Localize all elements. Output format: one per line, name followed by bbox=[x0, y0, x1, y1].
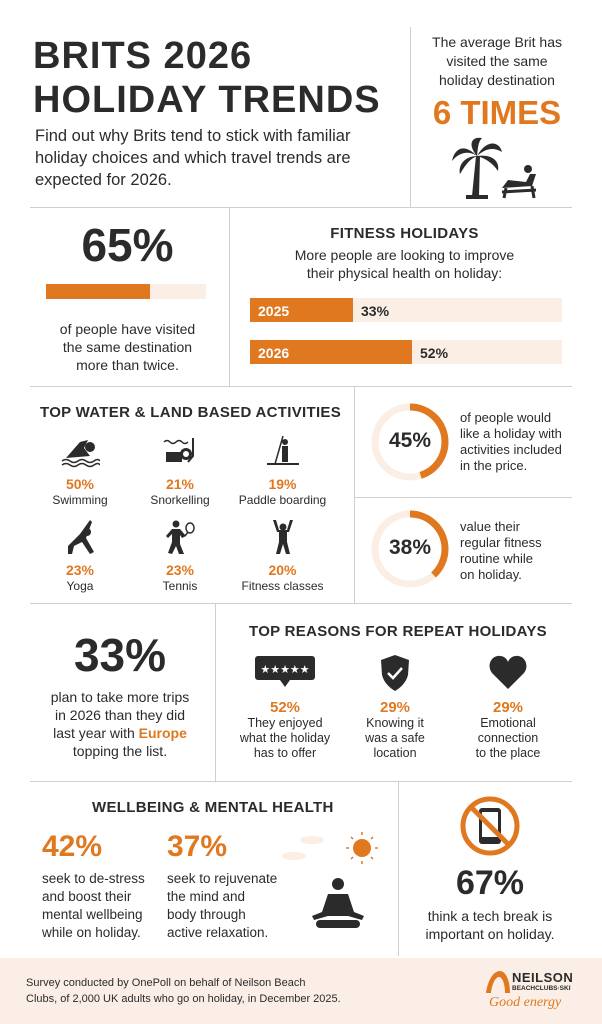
stat 37%: the mind and bbox=[167, 889, 245, 904]
donut 38%: value their bbox=[460, 519, 520, 534]
donut 45%: 45% bbox=[389, 429, 431, 452]
reason 1: ★★★★★ bbox=[260, 663, 310, 676]
panel: tech break: important on holiday. bbox=[426, 926, 554, 942]
stat 37%: 37% bbox=[167, 830, 227, 863]
bar 2025 bbox=[250, 298, 562, 322]
panel: activities bbox=[40, 404, 341, 593]
activity: snorkelling: Snorkelling bbox=[150, 493, 210, 507]
title bbox=[33, 35, 381, 121]
activity: snorkelling bbox=[150, 438, 210, 507]
panel: tech break bbox=[426, 796, 554, 942]
panel: fitness holidays: their physical health on holiday: bbox=[307, 265, 502, 281]
stat 42%: mental wellbeing bbox=[42, 907, 143, 922]
reason 3: connection bbox=[478, 731, 538, 745]
panel: 6 times: visited the same bbox=[446, 53, 548, 69]
logo: Good energy bbox=[489, 995, 561, 1010]
panel: fitness holidays: FITNESS HOLIDAYS bbox=[330, 225, 479, 242]
activity: paddle boarding bbox=[239, 436, 326, 507]
stat 42%: seek to de-stress bbox=[42, 871, 145, 886]
bar 2026 bbox=[250, 340, 562, 364]
panel: wellbeing: WELLBEING & MENTAL HEALTH bbox=[92, 799, 334, 816]
donut 45%: activities included bbox=[460, 442, 562, 457]
title: BRITS 2026 bbox=[33, 35, 252, 77]
stat 42%: and boost their bbox=[42, 889, 131, 904]
panel: top reasons: TOP REASONS FOR REPEAT HOLIDAYS bbox=[249, 623, 547, 640]
bar 65 bbox=[46, 284, 206, 299]
activity: yoga: 23% bbox=[66, 562, 94, 578]
panel: 33%: plan to take more trips bbox=[51, 689, 189, 705]
activity: swimming bbox=[52, 440, 108, 507]
panel: 33%: 33% bbox=[74, 629, 166, 681]
stat 42%: while on holiday. bbox=[42, 925, 141, 940]
reason 1: 52% bbox=[270, 699, 300, 716]
panel: 65%: of people have visited bbox=[60, 321, 195, 337]
activity: fitness classes: 20% bbox=[268, 562, 297, 578]
reason 1: They enjoyed bbox=[247, 716, 323, 730]
icon: no phone bbox=[460, 796, 520, 856]
reason 1 bbox=[240, 656, 330, 760]
donut 38% bbox=[372, 510, 542, 588]
activity: swimming: 50% bbox=[66, 476, 94, 492]
subtitle: Find out why Brits tend to stick with familiar holiday choices and which travel trends are expected for 2026. bbox=[35, 127, 351, 189]
bar 2025: 33% bbox=[361, 303, 389, 319]
donut 45% bbox=[372, 404, 562, 480]
stat 37% bbox=[167, 830, 277, 940]
donut 38%: routine while bbox=[460, 551, 533, 566]
panel: tech break: think a tech break is bbox=[428, 908, 552, 924]
reason 3: Emotional bbox=[480, 716, 536, 730]
donut 38%: 38% bbox=[389, 536, 431, 559]
stat 37%: body through bbox=[167, 907, 246, 922]
reason 2: 29% bbox=[380, 699, 410, 716]
panel: 6 times: The average Brit has bbox=[432, 34, 562, 50]
activity: tennis: 23% bbox=[166, 562, 194, 578]
activity: tennis: Tennis bbox=[163, 579, 197, 593]
panel: top reasons bbox=[240, 623, 547, 760]
panel: 33%: in 2026 than they did bbox=[55, 707, 185, 723]
stat 42%: 42% bbox=[42, 830, 102, 863]
activity: fitness classes bbox=[241, 520, 324, 593]
activity: yoga bbox=[66, 520, 94, 593]
activity: paddle boarding: Paddle boarding bbox=[239, 493, 326, 507]
footer bbox=[0, 958, 602, 1024]
reason 1: what the holiday bbox=[240, 731, 330, 745]
activity: snorkelling: 21% bbox=[166, 476, 194, 492]
donut 38%: regular fitness bbox=[460, 535, 542, 550]
reason 3 bbox=[476, 656, 540, 760]
activity: fitness classes: Fitness classes bbox=[241, 579, 324, 593]
reason 2: location bbox=[373, 746, 417, 760]
activity: swimming: Swimming bbox=[52, 493, 108, 507]
panel: 33%: last year with Europe bbox=[53, 725, 187, 741]
title: HOLIDAY TRENDS bbox=[33, 79, 381, 121]
panel: tech break: 67% bbox=[456, 864, 524, 902]
big stat: 6 times: 6 TIMES bbox=[433, 94, 561, 131]
panel: 65%: 65% bbox=[81, 219, 174, 271]
panel: 6 times: holiday destination bbox=[439, 72, 555, 88]
bar 2026: 52% bbox=[420, 345, 448, 361]
heading: TOP WATER & LAND BASED ACTIVITIES bbox=[40, 404, 341, 421]
reason 3: 29% bbox=[493, 699, 523, 716]
panel: 65%: the same destination bbox=[63, 339, 192, 355]
donut 38%: on holiday. bbox=[460, 567, 522, 582]
stat 37%: active relaxation. bbox=[167, 925, 268, 940]
panel: 33%: topping the list. bbox=[73, 743, 167, 759]
bar 2025: 2025 bbox=[258, 303, 289, 319]
footer: Clubs, of 2,000 UK adults who go on holiday, in December 2025. bbox=[26, 993, 341, 1005]
stat 37%: seek to rejuvenate bbox=[167, 871, 277, 886]
reason 2: Knowing it bbox=[366, 716, 424, 730]
panel: fitness holidays bbox=[250, 225, 562, 364]
logo: NEILSON bbox=[512, 970, 573, 985]
panel: 65%: more than twice. bbox=[76, 357, 179, 373]
panel: 65% bbox=[46, 219, 206, 373]
reason 2: was a safe bbox=[365, 731, 425, 745]
bar 2026: 2026 bbox=[258, 345, 289, 361]
logo: BEACHCLUBS·SKI bbox=[512, 985, 570, 992]
footer: Survey conducted by OnePoll on behalf of Neilson Beach bbox=[26, 977, 305, 989]
icon: meditation & sun bbox=[282, 832, 378, 928]
activity: yoga: Yoga bbox=[67, 579, 93, 593]
logo bbox=[486, 970, 573, 1010]
reason 2 bbox=[365, 655, 425, 760]
activity: paddle boarding: 19% bbox=[268, 476, 297, 492]
panel: 33% bbox=[51, 629, 189, 759]
icon: palm and lounger bbox=[452, 138, 536, 199]
reason 1: has to offer bbox=[254, 746, 316, 760]
activity: tennis bbox=[162, 520, 197, 593]
donut 45%: in the price. bbox=[460, 458, 527, 473]
stat 42% bbox=[42, 830, 145, 940]
panel: fitness holidays: More people are looking to improve bbox=[295, 247, 514, 263]
panel: wellbeing bbox=[42, 799, 378, 940]
donut 45%: of people would bbox=[460, 410, 551, 425]
donut 45%: like a holiday with bbox=[460, 426, 562, 441]
panel: 6 times bbox=[432, 34, 562, 199]
reason 3: to the place bbox=[476, 746, 540, 760]
